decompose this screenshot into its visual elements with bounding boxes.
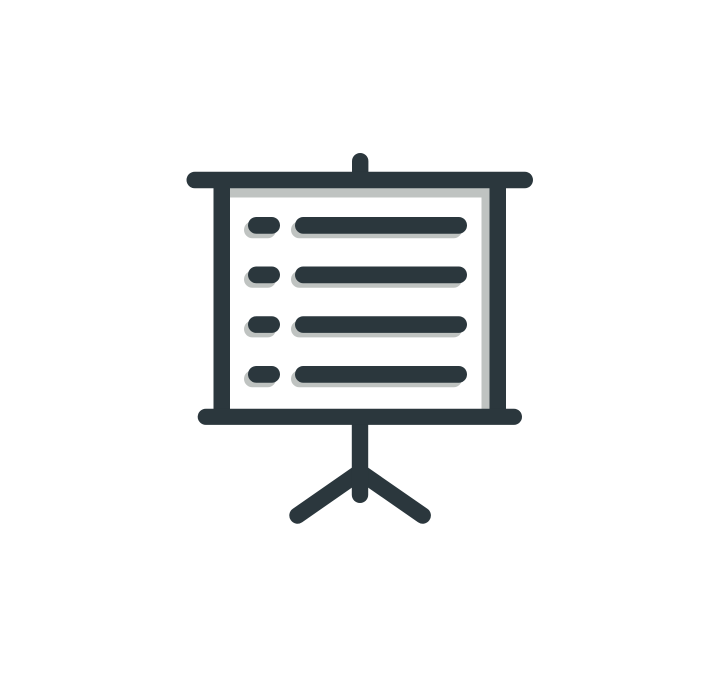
- screen panel: [222, 180, 498, 417]
- tripod stand: [298, 420, 423, 516]
- list row 1: [244, 217, 467, 238]
- bottom bar: [198, 409, 522, 425]
- list row 4: [244, 366, 467, 387]
- list row 2: [244, 266, 467, 288]
- list row 3: [244, 316, 467, 337]
- screen frame and top bar: [186, 153, 533, 415]
